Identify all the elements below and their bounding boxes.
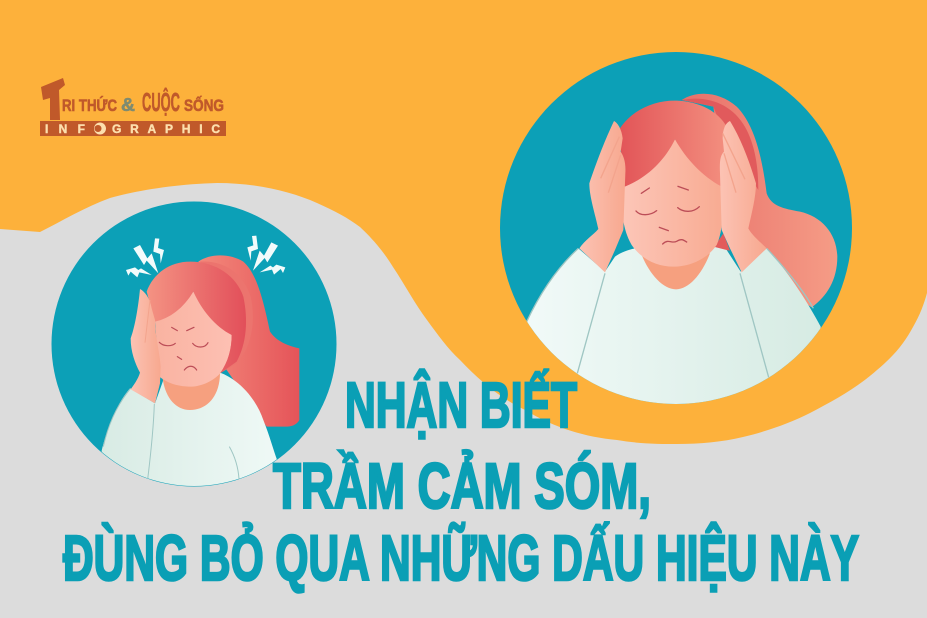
logo wordmark: CUỘC	[142, 87, 180, 117]
right hand	[720, 121, 767, 272]
face	[155, 292, 232, 387]
left hand	[579, 121, 625, 272]
lightning bolts right	[247, 236, 285, 275]
logo: Tri Thức & Cuộc Sống Infographic	[40, 78, 226, 136]
neck	[163, 373, 220, 410]
logo infographic band: INF	[45, 122, 85, 136]
lightning bolts left	[126, 238, 164, 277]
woman figure	[527, 94, 837, 413]
eyes and brows	[636, 186, 699, 231]
shirt seams	[527, 248, 813, 377]
hand	[131, 289, 161, 403]
hair dark band	[682, 99, 758, 190]
front hair	[620, 101, 727, 187]
title line 1: NHẬN BIẾT	[345, 368, 577, 441]
logo infographic band: GRAPHIC	[112, 122, 220, 136]
mouth	[184, 366, 197, 370]
title line 2: TRẦM CẢM SÓM,	[273, 449, 651, 522]
large circle illustration: woman covering ears	[500, 52, 852, 413]
front hair	[147, 262, 246, 373]
woman figure	[102, 236, 299, 493]
logo wordmark: RI THỨC	[62, 96, 117, 115]
shirt seams	[103, 388, 239, 479]
face	[622, 139, 723, 267]
neck back hair	[713, 233, 730, 251]
logo wordmark: &	[121, 95, 135, 115]
eyes and brows	[159, 327, 208, 359]
grey wave background	[0, 183, 927, 618]
hair dark band	[200, 262, 226, 373]
finger lines	[145, 300, 150, 343]
shirt	[102, 373, 277, 493]
logo wordmark	[62, 87, 224, 117]
logo infographic band	[40, 121, 226, 136]
neck	[642, 253, 710, 289]
logo wordmark: SỐNG	[184, 95, 224, 115]
back hair	[198, 255, 299, 427]
mouth	[663, 240, 687, 244]
teal circle	[500, 52, 852, 404]
title	[63, 368, 859, 594]
shirt	[527, 247, 821, 413]
back hair	[682, 94, 837, 307]
logo big T	[41, 78, 65, 120]
teal circle	[52, 202, 336, 486]
small circle illustration: woman with headache	[52, 202, 336, 493]
finger lines	[601, 133, 745, 193]
